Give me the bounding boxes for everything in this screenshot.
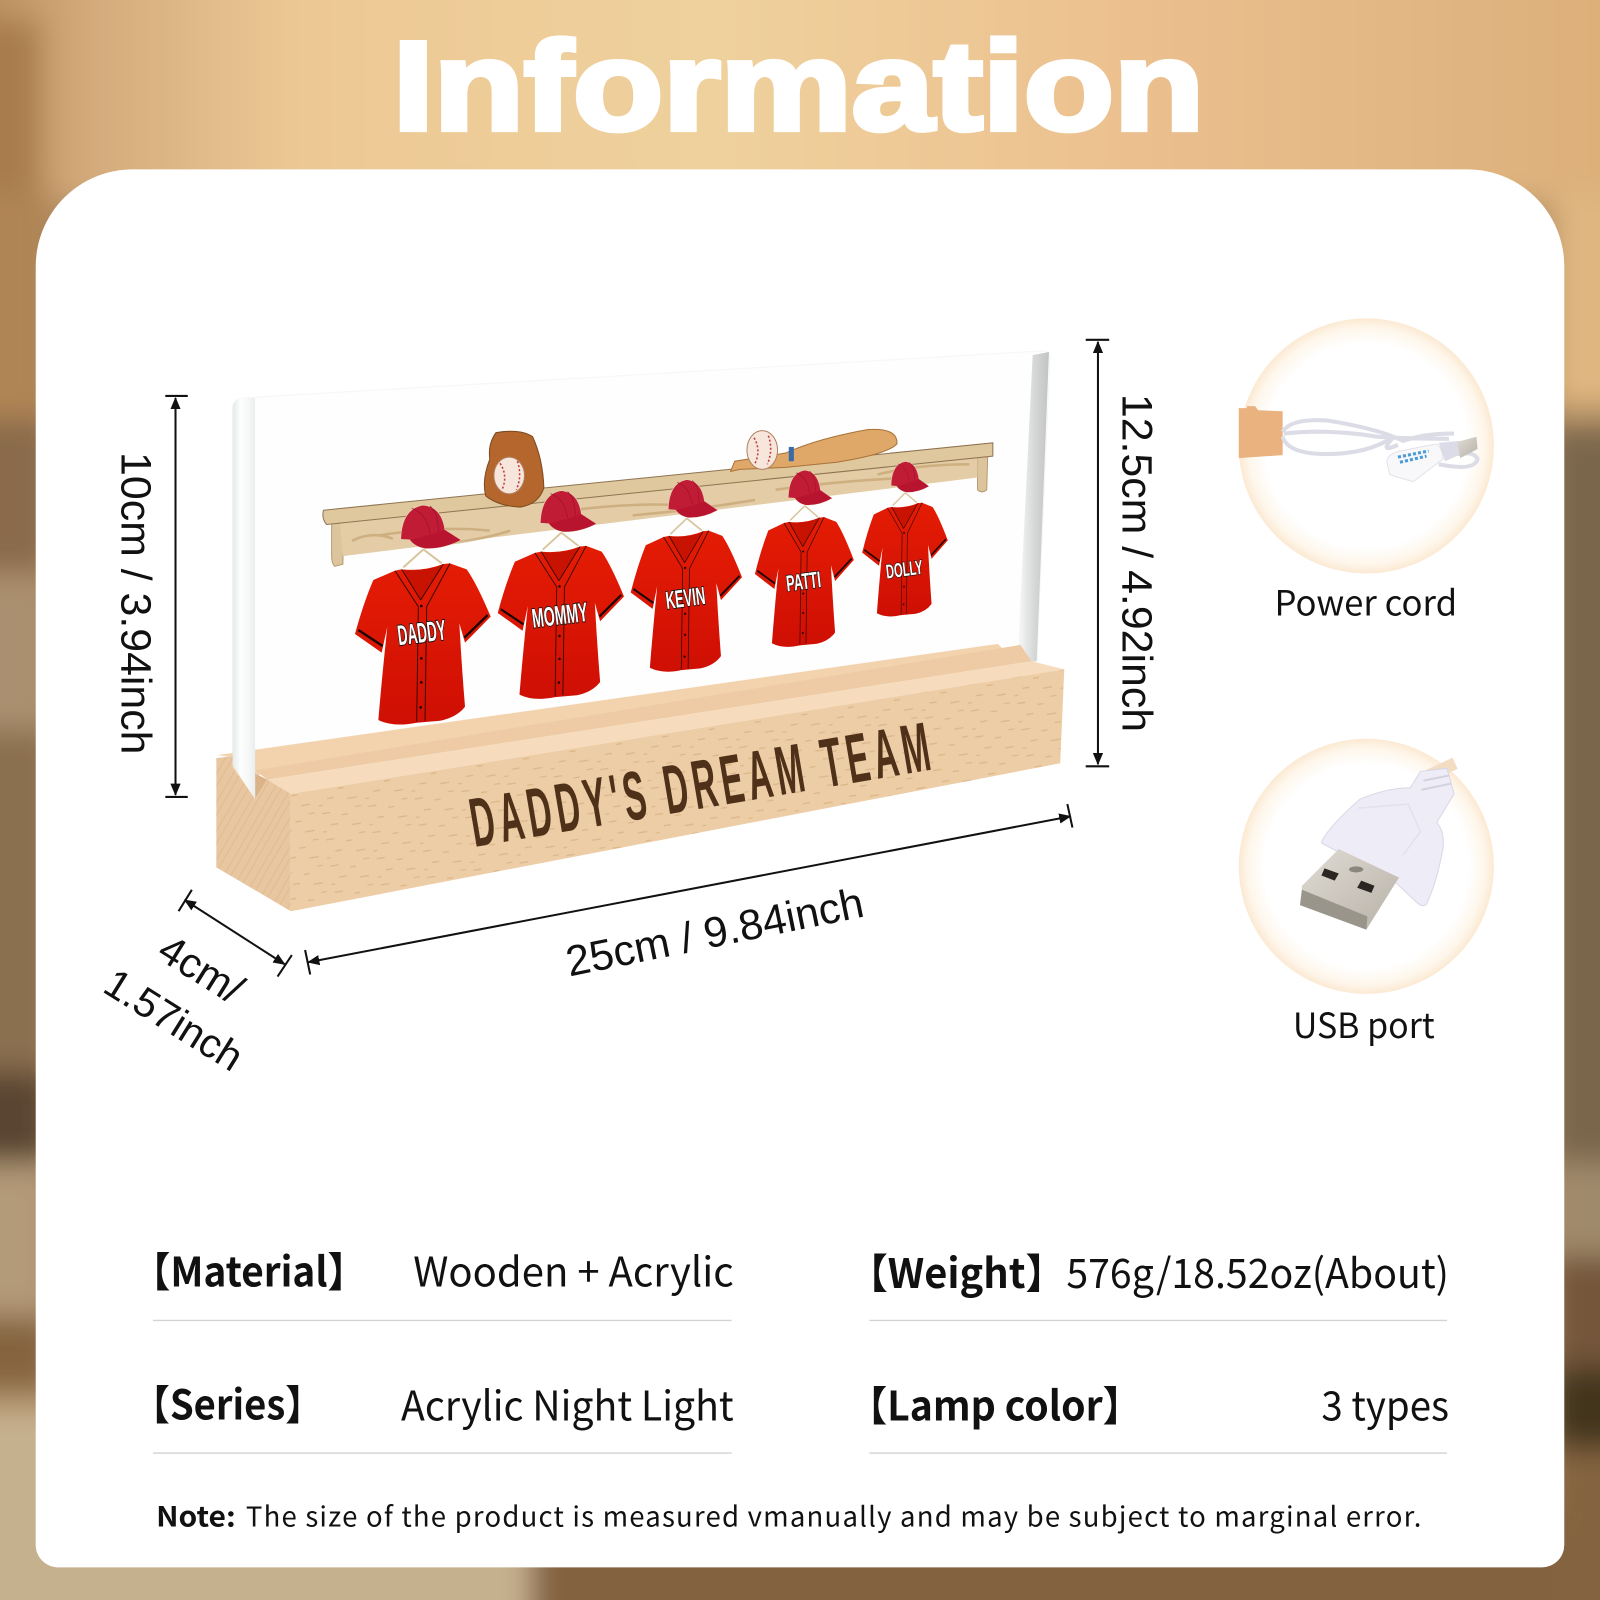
- product: acrylic night light: [216, 351, 1064, 911]
- title: Information: [393, 15, 1204, 157]
- label: 25cm: 25cm / 9.84inch: [562, 879, 868, 986]
- jersey: DOLLY: [862, 462, 948, 616]
- label: 12.5cm: 12.5cm / 4.92inch: [1112, 394, 1160, 732]
- wooden base: [216, 398, 1064, 911]
- dimension: depth 4cm: [96, 890, 292, 1080]
- jersey: PATTI: [755, 470, 854, 647]
- icon: baseball glove: [484, 431, 544, 507]
- dimension: height 10cm: [111, 396, 188, 797]
- dimension: height 12.5cm: [1086, 340, 1160, 766]
- bat grip band: [789, 447, 794, 461]
- jersey: KEVIN: [631, 480, 742, 672]
- jersey: PATTI: PATTI: [785, 566, 822, 597]
- panel: power cord circle: [1239, 318, 1494, 573]
- label: 10cm: 10cm / 3.94inch: [111, 452, 159, 755]
- jersey: MOMMY: MOMMY: [530, 597, 589, 634]
- panel: USB port circle: [1239, 739, 1494, 994]
- spec: series: [132, 1372, 734, 1432]
- spec value: weight: 576g/18.52oz(About): [1066, 1241, 1449, 1300]
- acrylic panel: [233, 351, 1050, 799]
- label: USB port: USB port: [1293, 998, 1435, 1048]
- jersey: DADDY: [355, 505, 491, 725]
- label: 1.57inch: 1.57inch: [96, 959, 251, 1080]
- USB plug photo: [1300, 763, 1455, 930]
- spec value: material: Wooden + Acrylic: [413, 1240, 734, 1299]
- power cord photo: [1239, 406, 1478, 482]
- engraved team name: DADDY'S DREAM TEAM: [464, 707, 940, 862]
- label: 4cm: 4cm/: [150, 925, 252, 1013]
- jersey: MOMMY: [498, 491, 624, 699]
- spec: material: [132, 1240, 734, 1299]
- note: The size of the product is measured vmanually and may be subject to marginal error.: [246, 1495, 1421, 1535]
- jersey: DOLLY: DOLLY: [885, 557, 924, 584]
- spec label: weight: 【Weight】: [848, 1241, 1065, 1300]
- dimension: width 25cm: [305, 804, 1072, 986]
- spec value: series: Acrylic Night Light: [401, 1373, 734, 1432]
- spec label: lamp color: 【Lamp color】: [848, 1373, 1142, 1432]
- spec: lamp color: [848, 1373, 1449, 1432]
- spec: weight: [848, 1241, 1449, 1300]
- icon: baseball bat: [731, 429, 897, 471]
- icon: baseball: [747, 431, 778, 469]
- jersey: DADDY: DADDY: [396, 615, 448, 652]
- spec label: material: 【Material】: [132, 1240, 366, 1299]
- label: power cord: Power cord: [1274, 575, 1457, 625]
- spec label: series: 【Series】: [132, 1372, 323, 1431]
- wooden shelf: [323, 443, 993, 566]
- note: Note:: [156, 1495, 236, 1535]
- jersey: KEVIN: KEVIN: [664, 582, 707, 615]
- acrylic left edge: [233, 398, 255, 799]
- spec value: lamp color: 3 types: [1321, 1373, 1449, 1432]
